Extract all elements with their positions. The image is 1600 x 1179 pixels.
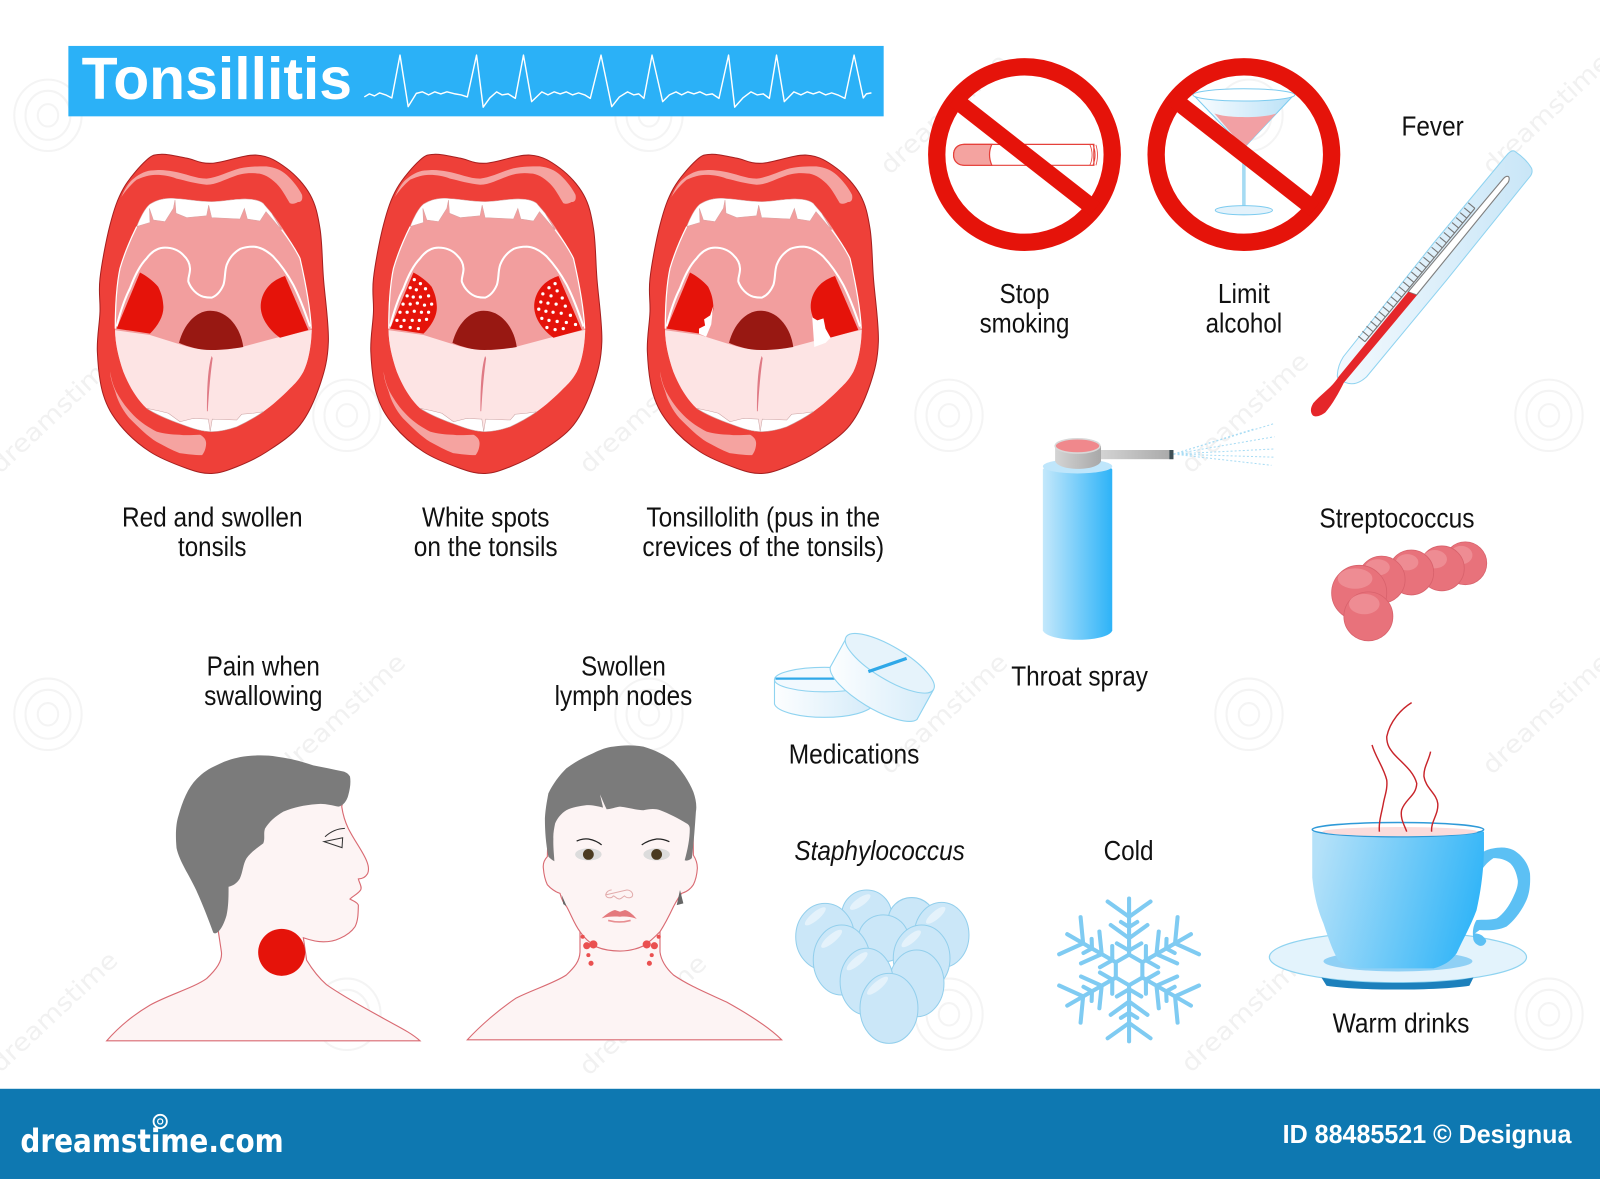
- icon: snowflake: [1057, 898, 1202, 1041]
- watermark text: dreamstime: [1476, 647, 1600, 780]
- watermark text: dreamstime: [272, 647, 411, 780]
- icon: staphylococcus cluster: [796, 890, 969, 1043]
- label: red and swollen tonsils: [122, 502, 303, 562]
- label: limit alcohol: alcohol: [1206, 308, 1282, 339]
- icon: throat spray: [1043, 423, 1274, 640]
- label: pain when swallowing: [204, 651, 322, 711]
- footer bar: ID 88485521 © Designua: [1283, 1121, 1572, 1149]
- label: limit alcohol: [1206, 278, 1282, 339]
- label: fever: Fever: [1402, 111, 1464, 142]
- watermark text: dreamstime: [573, 948, 712, 1081]
- mouth: tonsillolith: [647, 154, 878, 474]
- label: white spots: [414, 502, 558, 562]
- label: white spots: on the tonsils: [414, 531, 558, 562]
- icon: warm drink cup: [1269, 703, 1530, 990]
- footer bar: [0, 1089, 1600, 1179]
- label: warm drinks: Warm drinks: [1333, 1008, 1469, 1039]
- watermark text: dreamstime: [1175, 945, 1314, 1078]
- icon: thermometer: [1311, 151, 1532, 416]
- label: medications: Medications: [789, 738, 919, 769]
- figure: profile head with sore throat: [107, 755, 420, 1041]
- watermark text: dreamstime: [874, 47, 1013, 180]
- title banner: [68, 45, 884, 116]
- label: stop smoking: [980, 278, 1069, 339]
- mouth: red and swollen tonsils: [97, 154, 328, 474]
- label: tonsillolith: [642, 502, 884, 562]
- watermark text: dreamstime: [874, 647, 1013, 780]
- mouth: white spots on the tonsils: [371, 154, 602, 474]
- label: tonsillolith: Tonsillolith (pus in the: [646, 502, 880, 533]
- label: stop smoking: smoking: [980, 308, 1069, 339]
- icon: streptococcus chain: [1332, 542, 1487, 641]
- footer logo: dreamstime.com: [20, 1124, 284, 1160]
- figure: front head with swollen lymph nodes: [467, 745, 782, 1040]
- watermark text: dreamstime: [1175, 346, 1314, 479]
- watermark text: dreamstime: [1476, 47, 1600, 180]
- label: red and swollen tonsils: Red and swollen: [122, 502, 303, 533]
- label: pain when swallowing: Pain when: [207, 651, 320, 682]
- label: swollen lymph nodes: [555, 651, 692, 711]
- label: pain when swallowing: swallowing: [204, 680, 322, 711]
- label: stop smoking: Stop: [999, 278, 1049, 309]
- icon: no smoking: [937, 67, 1112, 242]
- label: limit alcohol: Limit: [1218, 278, 1270, 309]
- label: red and swollen tonsils: tonsils: [178, 531, 246, 562]
- label: cold: Cold: [1104, 835, 1154, 866]
- label: swollen lymph nodes: lymph nodes: [555, 680, 692, 711]
- label: streptococcus: Streptococcus: [1319, 503, 1474, 534]
- label: throat spray: Throat spray: [1011, 661, 1148, 692]
- label: swollen lymph nodes: Swollen: [581, 651, 666, 682]
- icon: medications tablets: [774, 623, 942, 721]
- watermark text: dreamstime: [573, 346, 712, 479]
- label: white spots: White spots: [422, 502, 549, 533]
- icon: limit alcohol: [1156, 67, 1332, 242]
- label: staphylococcus: Staphylococcus: [794, 835, 965, 866]
- title banner: Tonsillitis: [82, 45, 352, 112]
- label: tonsillolith: crevices of the tonsils): [642, 531, 884, 562]
